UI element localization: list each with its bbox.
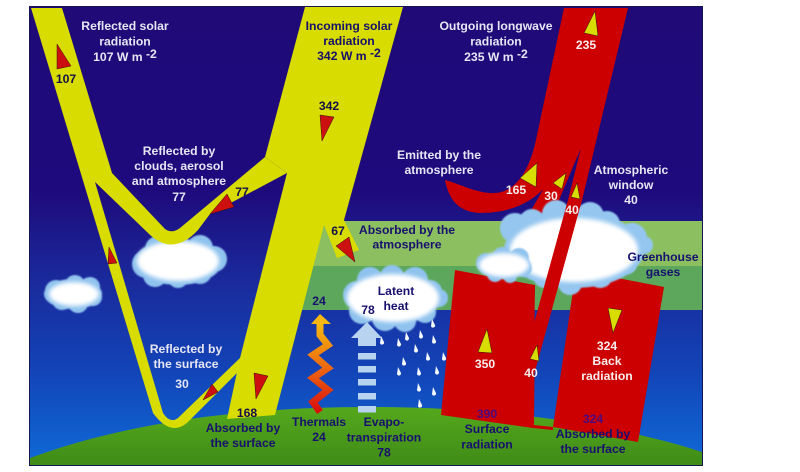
label: 350: 350 (475, 357, 495, 371)
yellow arrowhead: 165 (520, 163, 537, 187)
label: greenhouse gases: Greenhouse (627, 250, 699, 264)
label: reflected solar radiation: Reflected solar (81, 19, 169, 33)
label: outgoing longwave radiation: radiation (470, 34, 522, 48)
label: 235: 235 (576, 38, 596, 52)
longwave beam: outgoing with prongs (445, 8, 628, 214)
label: incoming solar radiation: 342 W m (317, 49, 367, 63)
red arrowhead: absorbed 168 (254, 373, 268, 399)
label: surface radiation: radiation (461, 438, 513, 452)
label: incoming solar radiation: -2 (367, 46, 381, 60)
label: back radiation: radiation (581, 369, 633, 383)
label: reflected solar radiation: -2 (143, 47, 157, 61)
label: 77: 77 (235, 185, 249, 199)
label: evapotranspiration: Evapo- (364, 415, 404, 429)
label: atmospheric window: Atmospheric (594, 163, 668, 177)
thermals arrow (311, 314, 331, 412)
label: back radiation: Back (592, 354, 622, 368)
yellow arrowhead: back radiation (608, 308, 622, 333)
atmosphere band: lower (300, 266, 702, 310)
label: 168: 168 (237, 406, 257, 420)
label: absorbed by the atmosphere: Absorbed by the (359, 223, 455, 237)
label: absorbed by the surface left: Absorbed by (206, 421, 280, 435)
red arrowhead: surface 30 (203, 384, 218, 400)
label: greenhouse gases: gases (646, 265, 680, 279)
label: reflected by clouds: 77 (172, 190, 186, 204)
label: reflected by the surface: Reflected by (150, 342, 222, 356)
label: reflected by the surface: the surface (153, 357, 219, 371)
label: 30 upper: 30 (544, 189, 558, 203)
atmosphere band: upper (310, 221, 702, 267)
label: 390 surface radiation: 390 (477, 407, 497, 421)
cloud: large greenhouse (500, 200, 653, 295)
label: incoming solar radiation: Incoming solar (306, 19, 392, 33)
yellow arrowhead: 40 window (571, 183, 580, 199)
label: 24 atmosphere: 24 (312, 294, 326, 308)
evapotranspiration arrow (351, 322, 382, 412)
cloud: center, reflecting (132, 234, 227, 288)
label: 107: 107 (56, 72, 76, 86)
label: 342: 342 (319, 99, 339, 113)
gap between outgoing prongs (556, 148, 581, 207)
label: thermals: 24 (312, 430, 326, 444)
solar beam: incoming (227, 7, 403, 419)
label: surface radiation: Surface (465, 422, 509, 436)
label: reflected solar radiation: 107 W m (93, 50, 143, 64)
longwave beam: atmospheric window (528, 148, 594, 425)
solar beams: reflected paths (31, 8, 287, 428)
label: emitted by the atmosphere: Emitted by the (397, 148, 481, 162)
label: thermals: Thermals (292, 415, 346, 429)
label: absorbed by the surface left: the surface (210, 436, 276, 450)
label: latent heat: Latent (378, 284, 414, 298)
yellow arrowhead: 30 (553, 173, 566, 189)
label: atmospheric window: 40 (624, 193, 638, 207)
label: evapotranspiration: transpiration (347, 430, 421, 444)
label: absorbed by the atmosphere: atmosphere (372, 238, 442, 252)
cloud: far left (44, 275, 102, 313)
cloud: small by surface block (476, 247, 532, 283)
label: outgoing longwave radiation: Outgoing longwave (439, 19, 553, 33)
label: 40 window beam: 40 (565, 203, 579, 217)
red arrowhead: clouds 77 (210, 194, 234, 214)
label: incoming solar radiation: radiation (323, 34, 375, 48)
label: 67: 67 (331, 224, 345, 238)
label: back radiation: 324 (597, 339, 617, 353)
cloud: latent heat (343, 265, 448, 332)
surface radiation block (441, 270, 553, 430)
label: evapotranspiration: 78 (377, 446, 391, 460)
label: atmospheric window: window (608, 178, 654, 192)
label: reflected by clouds: clouds, aerosol (134, 159, 224, 173)
yellow arrowhead: 40 lower (530, 345, 539, 361)
red arrowhead: narrow surface reflection (108, 247, 117, 264)
yellow arrowhead: 350 (478, 329, 492, 353)
label: emitted by the atmosphere: atmosphere (404, 163, 474, 177)
label: reflected by clouds: Reflected by (143, 144, 215, 158)
label: 324 absorbed: 324 (583, 412, 603, 426)
yellow arrowhead: 235 (584, 11, 598, 36)
label: latent heat: heat (383, 299, 409, 313)
label: 165: 165 (506, 183, 526, 197)
label: reflected by the surface: 30 (175, 377, 189, 391)
red arrowhead: reflected 107 (57, 44, 71, 69)
label: 40 lower: 40 (524, 366, 538, 380)
back radiation block (553, 270, 664, 442)
label: absorbed by the surface right: Absorbed by (556, 427, 630, 441)
red arrowhead: incoming 342 (320, 115, 334, 141)
label: outgoing longwave radiation: 235 W m (464, 50, 514, 64)
red arrowhead: absorbed 67 (336, 237, 355, 262)
rain drops (380, 319, 446, 408)
label: outgoing longwave radiation: -2 (514, 47, 528, 61)
label: 78: 78 (361, 303, 375, 317)
earth surface (30, 407, 702, 465)
label: absorbed by the surface right: the surface (560, 442, 626, 456)
label: reflected solar radiation: radiation (99, 34, 151, 48)
label: reflected by clouds: and atmosphere (132, 174, 226, 188)
